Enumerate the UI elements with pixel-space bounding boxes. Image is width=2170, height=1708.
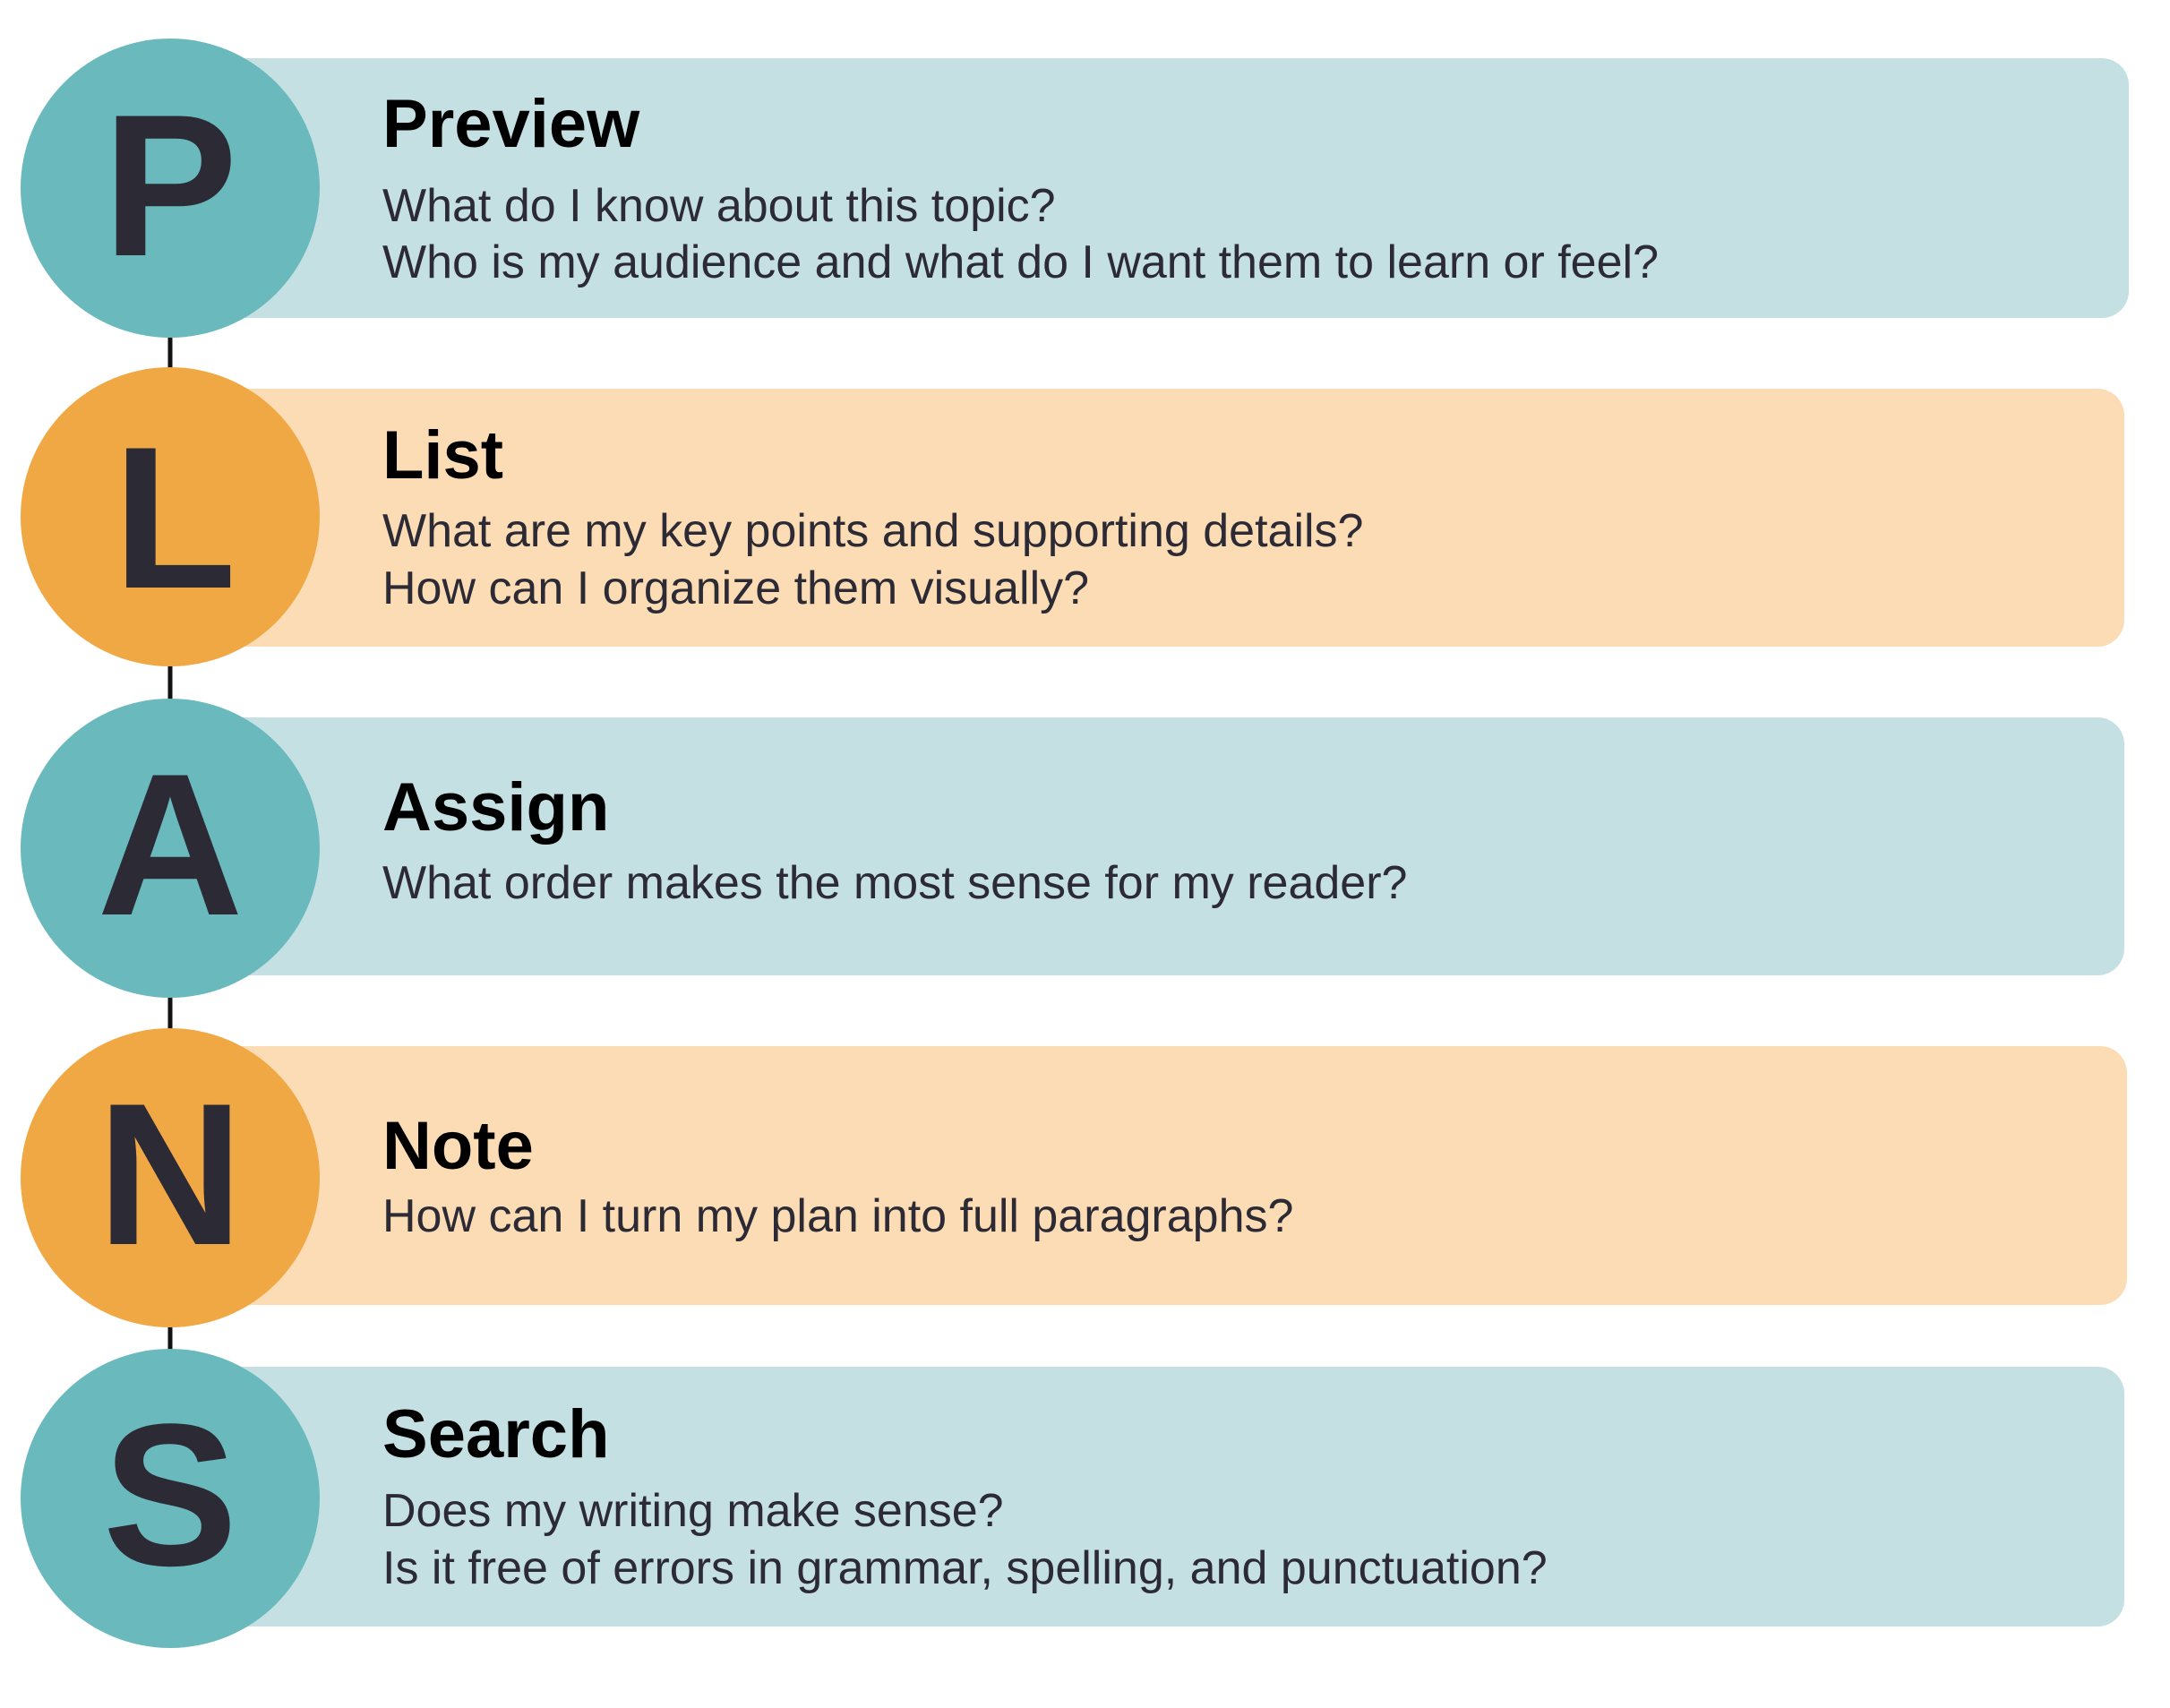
circle: N (21, 1028, 320, 1327)
heading: Note: Note (382, 1108, 534, 1184)
heading: Preview: Preview (382, 86, 640, 162)
circle: A (21, 699, 320, 998)
panel: Assign (21, 699, 2124, 998)
text: Note question: How can I turn my plan into full paragraphs? (382, 1190, 1293, 1242)
text: Preview questions: Who is my audience and what do I want them to learn or feel? (382, 236, 1659, 288)
text: Search questions: Does my writing make sense? (382, 1485, 1004, 1537)
circle: A: A (97, 731, 244, 957)
text: List questions: What are my key points and supporting details? (382, 505, 1363, 557)
text: List questions: How can I organize them visually? (382, 562, 1089, 614)
panel: Note (21, 1028, 2127, 1327)
heading: List: List (382, 417, 503, 494)
circle: S (21, 1349, 320, 1648)
circle: P: P (103, 72, 237, 298)
text: Preview questions (382, 180, 1659, 288)
circle: L: L (113, 404, 236, 631)
text: Preview questions: What do I know about this topic? (382, 180, 1056, 232)
text: Search questions: Is it free of errors in grammar, spelling, and punctuation? (382, 1542, 1548, 1594)
heading: Assign: Assign (382, 769, 609, 845)
circle: S: S (103, 1381, 237, 1608)
panel: Preview (21, 39, 2129, 338)
circle: N: N (97, 1060, 244, 1287)
circle: L (21, 367, 320, 666)
circle: P (21, 39, 320, 338)
text: Assign question: What order makes the most sense for my reader? (382, 857, 1407, 909)
panel: List (21, 367, 2124, 666)
heading: Search: Search (382, 1396, 609, 1472)
text: Search questions (382, 1485, 1548, 1594)
connector line (168, 188, 172, 1498)
text: List questions (382, 505, 1363, 614)
panel: Search (21, 1349, 2124, 1648)
